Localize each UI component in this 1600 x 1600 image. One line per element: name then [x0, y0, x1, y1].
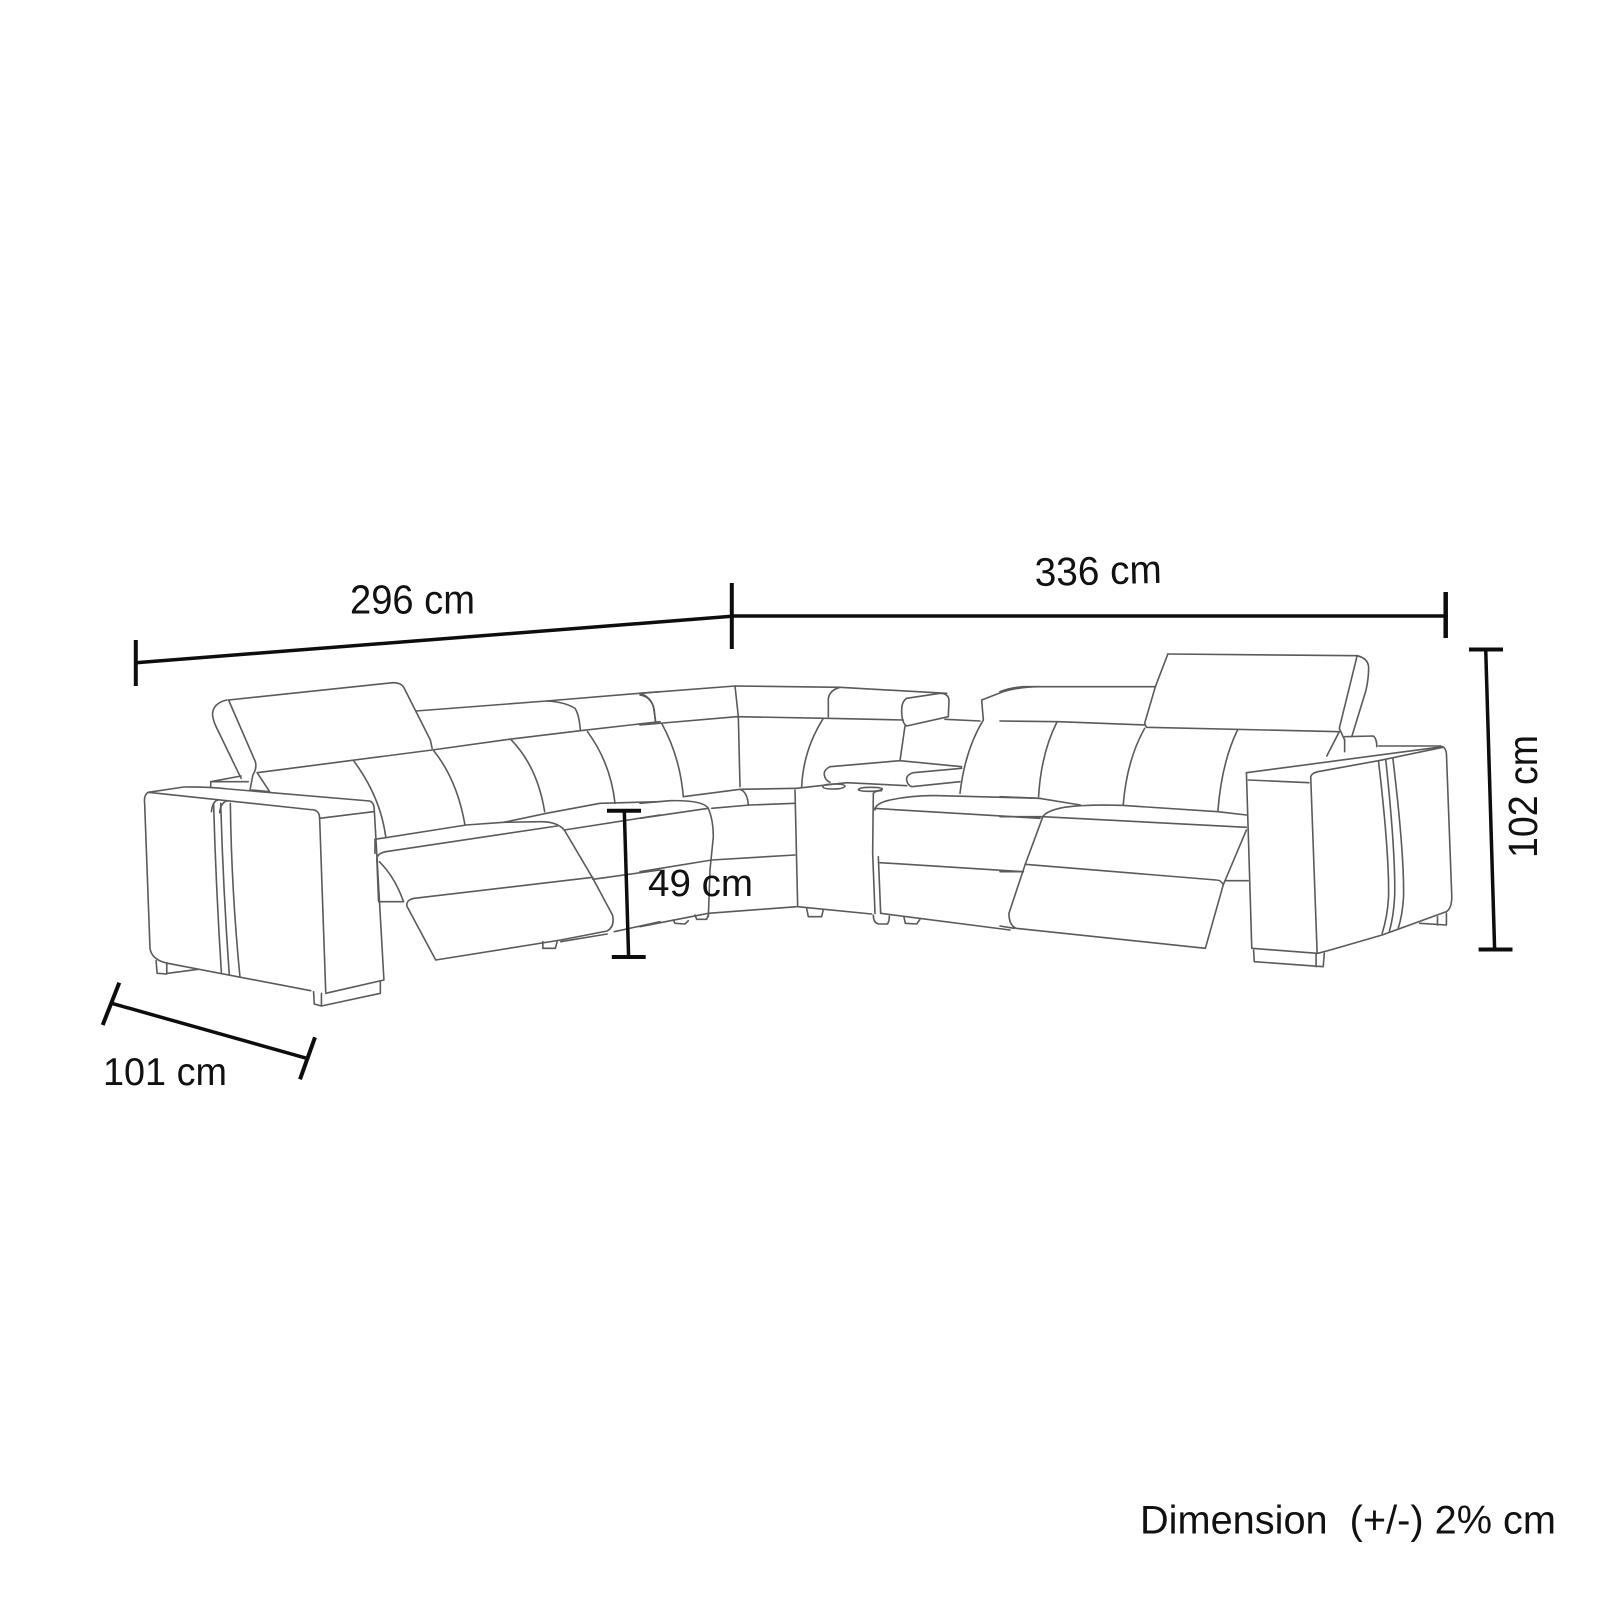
left recliner with extended footrest	[375, 802, 660, 960]
dimension: 102 cm line	[1469, 649, 1512, 950]
right recliner with extended footrest	[1000, 797, 1248, 948]
sofa line drawing	[144, 654, 1452, 1006]
label: 336 cm: 336 cm	[1034, 548, 1162, 595]
label: 296 cm: 296 cm	[350, 576, 475, 622]
note: dimension tolerance: Dimension (+/-) 2% cm	[1140, 1498, 1556, 1542]
right section seats and backs	[873, 687, 1040, 930]
label: 101 cm: 101 cm	[103, 1051, 227, 1094]
dimension: 101 cm line	[103, 983, 315, 1079]
dimension: 336 cm line	[732, 592, 1446, 638]
corner section and seats	[640, 686, 947, 927]
right armrest	[1246, 746, 1452, 967]
center console with cup holders	[795, 687, 980, 924]
left armrest	[144, 787, 384, 1006]
dimension: 49 cm line	[607, 811, 646, 957]
label: 102 cm: 102 cm	[1500, 735, 1546, 858]
label: 49 cm: 49 cm	[648, 863, 753, 905]
right raised headrest and backs	[1000, 654, 1377, 812]
left raised headrest and left section backs	[211, 683, 660, 837]
dimension: 296 cm line	[136, 583, 732, 686]
